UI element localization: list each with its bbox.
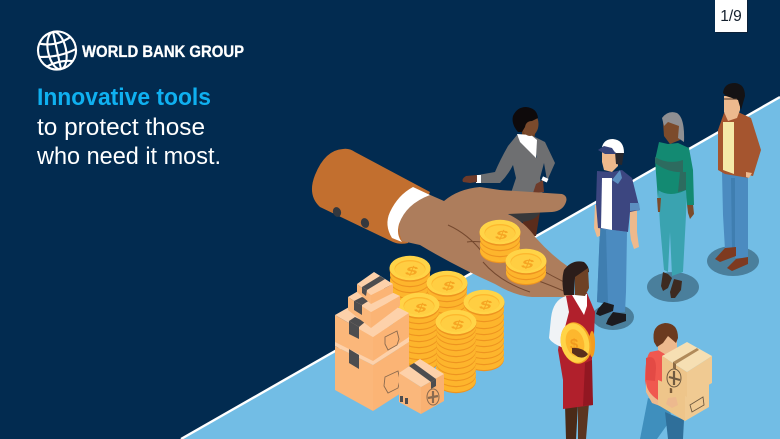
cuff (387, 187, 430, 242)
head (724, 96, 740, 121)
dress (558, 293, 595, 409)
logo wordmark: WORLD BANK GROUP (82, 42, 244, 61)
coin stacks: $ (412, 301, 430, 315)
collar (517, 134, 537, 158)
arm left (594, 205, 601, 237)
coin stack: rear left peeking (378, 288, 418, 314)
hands (657, 198, 661, 212)
hand on box (666, 397, 678, 408)
floor (181, 97, 780, 439)
head (602, 152, 618, 172)
glasses (724, 98, 737, 100)
shoes (661, 272, 672, 291)
hair (653, 323, 678, 347)
top (655, 142, 694, 205)
person: man in brown jacket (707, 83, 761, 276)
coin stack A (390, 256, 430, 329)
hair (513, 107, 538, 132)
coin stack B (426, 271, 468, 344)
boxes pile (335, 272, 444, 414)
hair (562, 261, 589, 295)
coin (589, 331, 595, 357)
legs (565, 405, 578, 439)
shoes (715, 247, 736, 262)
tee (601, 178, 612, 230)
coins in hand: $ (493, 228, 511, 242)
skirt (508, 212, 540, 222)
hair (662, 112, 684, 142)
arm (646, 381, 678, 409)
box: second (335, 294, 409, 361)
lower box (658, 377, 709, 421)
legs (520, 212, 540, 236)
hair (723, 83, 745, 110)
legs (640, 398, 672, 439)
arm right (630, 208, 639, 249)
person: woman in red dress (549, 261, 596, 439)
shirt (596, 170, 640, 232)
face (522, 112, 538, 136)
box: third (348, 283, 400, 328)
hand (572, 348, 588, 358)
person: woman in grey suit (462, 107, 555, 236)
sleeve (312, 149, 430, 244)
face (575, 268, 589, 296)
coins in hand: $ (519, 257, 537, 271)
palm (399, 187, 575, 299)
shadow (592, 304, 634, 330)
coin stacks: $ (440, 279, 458, 293)
head (663, 122, 680, 144)
hand (312, 149, 575, 299)
icon: globe (34, 27, 80, 74)
collar (572, 294, 587, 315)
cuffs and hands (476, 175, 481, 183)
shadow (647, 272, 699, 302)
box: bottom (335, 318, 409, 411)
person: boy carrying boxes (640, 323, 712, 439)
coin stacks: $ (449, 318, 467, 332)
sleeve buttons (332, 206, 370, 229)
jacket (478, 135, 555, 196)
coin stack E (436, 310, 476, 393)
page badge: 1/9 (720, 8, 742, 25)
coins in hand (480, 220, 546, 285)
box: top (357, 272, 393, 304)
jeans (597, 228, 627, 313)
coin stack upper (480, 220, 520, 263)
shadow (707, 246, 759, 276)
jacket (718, 112, 761, 178)
neck and face (658, 336, 677, 356)
sleeve (549, 296, 576, 352)
shirt (645, 350, 668, 402)
person: man in white cap (592, 139, 640, 330)
person: woman with grey hair (647, 112, 699, 302)
trousers (658, 188, 687, 276)
logo (34, 27, 244, 74)
coin stack C (398, 293, 440, 372)
page badge (715, 0, 748, 33)
coin stacks (378, 256, 504, 393)
heading: who need it most. (36, 143, 221, 170)
upper box (662, 342, 712, 397)
palm creases (448, 225, 566, 292)
coin stacks: $ (477, 298, 495, 312)
heading: Innovative tools (37, 84, 211, 111)
coin stack lower (506, 249, 546, 285)
heading (36, 84, 221, 170)
jeans (722, 172, 748, 258)
neck (522, 128, 536, 140)
hand (746, 172, 752, 178)
cap (602, 139, 624, 153)
coin stacks: $ (403, 264, 421, 278)
shoes (596, 302, 614, 316)
shirt (723, 122, 734, 174)
heading: to protect those (37, 114, 205, 141)
box: front small (399, 359, 444, 414)
coin stack D (464, 290, 504, 371)
person: woman in red dress: $ (570, 336, 579, 353)
